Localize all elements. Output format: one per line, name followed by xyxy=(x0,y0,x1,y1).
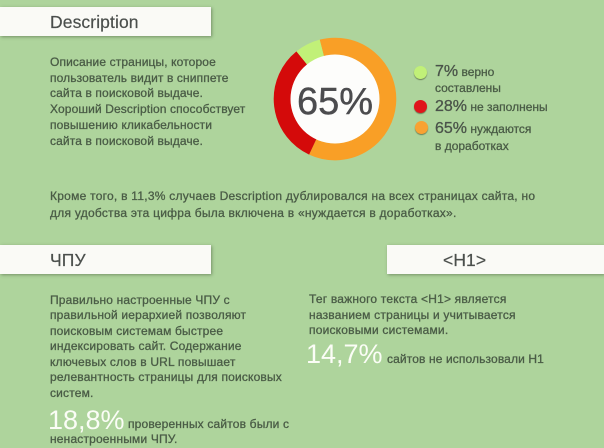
heading: Description: Description xyxy=(50,12,139,32)
text block: description intro xyxy=(50,55,246,148)
text block: ЧПУ body: ключевых слов в URL повышает xyxy=(50,355,236,369)
text block: description intro: повышению кликабельности xyxy=(50,118,212,132)
text block: ЧПУ body xyxy=(50,292,282,400)
text block: ЧПУ body: релевантность страницы для поисковых xyxy=(50,370,282,384)
heading: ЧПУ: ЧПУ xyxy=(50,250,86,270)
text block: H1 stat caption: сайтов не использовали Н1 xyxy=(387,352,544,366)
text block: description intro: сайта в поисковой выдаче. xyxy=(50,86,203,100)
center disc with value: 65% xyxy=(297,81,373,123)
panel: ЧПУ header xyxy=(0,245,211,274)
legend xyxy=(414,63,548,153)
text block: ЧПУ stat caption: проверенных сайтов были с xyxy=(128,417,289,431)
legend item: 7% xyxy=(414,63,501,95)
legend item: 28%: 28% не заполнены xyxy=(435,98,548,115)
text block: ЧПУ stat caption: ненастроенными ЧПУ. xyxy=(50,432,178,446)
text block: H1 body: поисковыми системами. xyxy=(309,323,448,337)
segment: orange 65% xyxy=(313,46,388,152)
legend item: 7%: составлены xyxy=(435,81,501,95)
legend item: 7%: 7% верно xyxy=(435,63,494,80)
segment: red 28% xyxy=(282,58,313,147)
legend item: 65%: 65% нуждаются xyxy=(435,120,531,137)
legend item: 65% xyxy=(414,120,531,153)
text block: duplicate note: Кроме того, в 11,3% случаев Description дублировался на всех страницах сайта, но xyxy=(50,189,535,203)
text block: H1 body: названием страницы и учитывается xyxy=(309,308,516,322)
text block: description intro: Описание страницы, которое xyxy=(50,55,216,69)
text block: description intro: Хороший Description способствует xyxy=(50,102,245,116)
text block: description intro: пользователь видит в сниппете xyxy=(50,71,229,85)
text block: ЧПУ stat caption xyxy=(50,417,289,446)
text block: H1 body: Тег важного текста <H1> является xyxy=(309,292,507,306)
text block: ЧПУ body: систем. xyxy=(50,386,94,400)
panel: description header xyxy=(0,7,211,36)
text block: ЧПУ body: правильной иерархией позволяют xyxy=(50,308,246,322)
donut chart: 65% xyxy=(274,38,396,160)
text block: H1 body xyxy=(309,292,516,337)
text block: duplicate note: для удобства эта цифра была включена в «нуждается в доработках». xyxy=(50,206,457,220)
heading: H1: <H1> xyxy=(443,250,486,270)
text block: ЧПУ body: индексировать сайт. Содержание xyxy=(50,339,242,353)
segment: green 7% xyxy=(302,48,322,58)
stat: 18,8%: 18,8% xyxy=(48,405,125,435)
panel: H1 header xyxy=(387,245,604,274)
text block: ЧПУ body: Правильно настроенные ЧПУ с xyxy=(50,292,230,306)
text block: ЧПУ body: поисковым системам быстрее xyxy=(50,324,223,338)
text block: description intro: сайта в поисковой выдаче. xyxy=(50,134,203,148)
text block: duplicate note xyxy=(50,189,535,220)
stat: 14,7%: 14,7% xyxy=(306,339,383,369)
legend item: 65%: в доработках xyxy=(435,139,509,153)
